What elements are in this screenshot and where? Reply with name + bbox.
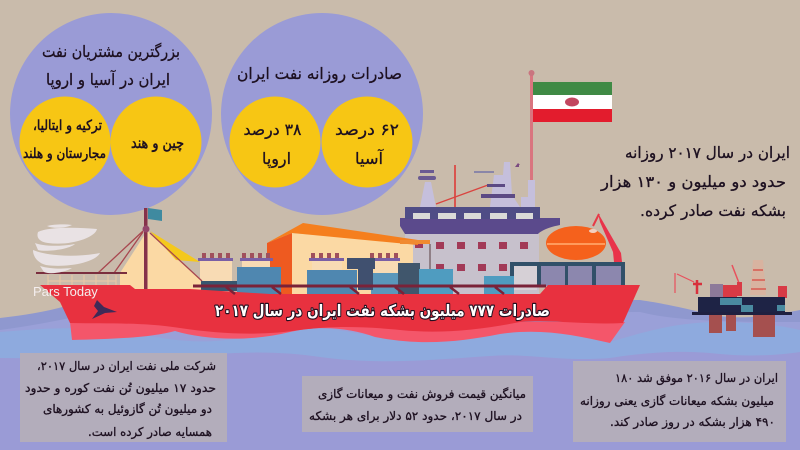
warehouse <box>267 223 431 294</box>
text block: 2017 daily export: ایران در سال ۲۰۱۷ روزانه <box>625 144 790 163</box>
text box: national oil company: دو میلیون تُن گازوئیل به کشورهای <box>43 402 212 417</box>
hull <box>40 285 640 343</box>
text box: national oil company: حدود ۱۷ میلیون تُن نفت کوره و حدود <box>25 381 216 396</box>
text box: average price <box>302 376 533 432</box>
bubble: 38 percent Europe: ۳۸ درصد <box>244 120 302 140</box>
heading: biggest customers <box>42 42 180 90</box>
text box: gas condensate <box>573 361 786 442</box>
text block: 2017 daily export: بشکه نفت صادر کرده. <box>640 202 786 220</box>
bubble: 62 percent Asia: آسیا <box>355 149 385 168</box>
lifeboat <box>546 213 622 262</box>
bubble: China and India: چین و هند <box>131 134 184 152</box>
text box: national oil company: شرکت ملی نفت ایران در سال ۲۰۱۷، <box>37 359 216 374</box>
heading: biggest customers: بزرگترین مشتریان نفت <box>42 42 180 62</box>
banner: annual exports: صادرات ۷۷۷ میلیون بشکه نفت ایران در سال ۲۰۱۷ <box>215 301 550 320</box>
heading: daily exports: صادرات روزانه نفت ایران <box>237 64 402 84</box>
text box: gas condensate: ۴۹۰ هزار بشکه در روز صادر کند. <box>610 415 775 430</box>
bubble: Turkey Italy Hungary Netherlands: ترکیه و ایتالیا، <box>33 118 102 134</box>
icon: Iranian flag <box>528 70 612 180</box>
ship bridge towers <box>418 162 535 208</box>
text box: gas condensate: میلیون بشکه میعانات گازی یعنی روزانه <box>580 394 774 409</box>
illustration: oil rig <box>675 260 792 337</box>
bubble: 38 percent Europe: اروپا <box>262 149 291 169</box>
heading: biggest customers: ایران در آسیا و اروپا <box>46 70 170 90</box>
superstructure <box>400 207 560 295</box>
bubble: 38 percent Europe <box>230 96 320 188</box>
text block: 2017 daily export <box>600 144 790 220</box>
foremast and sails <box>36 208 202 290</box>
circle panel: biggest customers <box>10 13 212 215</box>
circle panel: daily exports <box>221 13 423 215</box>
logo: Pars Today: Pars Today <box>33 284 98 299</box>
bubble: Turkey Italy Hungary Netherlands: مجارستان و هلند <box>23 146 106 162</box>
sea background <box>0 300 800 450</box>
bubble: 62 percent Asia <box>322 96 412 188</box>
text box: average price: میانگین قیمت فروش نفت و میعانات گازی <box>318 387 526 402</box>
icon: hull emblem <box>92 300 117 319</box>
bubble: China and India <box>110 96 202 188</box>
text box: average price: در سال ۲۰۱۷، حدود ۵۲ دلار برای هر بشکه <box>309 409 522 424</box>
bubble: 62 percent Asia: ۶۲ درصد <box>335 120 399 140</box>
containers <box>188 253 514 294</box>
cargo cage <box>510 262 625 290</box>
text block: 2017 daily export: حدود دو میلیون و ۱۳۰ هزار <box>600 173 786 192</box>
text box: national oil company: همسایه صادر کرده است. <box>88 425 212 440</box>
text box: gas condensate: ایران در سال ۲۰۱۶ موفق شد ۱۸۰ <box>615 371 778 386</box>
bubble: Turkey Italy Hungary Netherlands <box>20 96 110 188</box>
illustration: tanker ship <box>36 162 640 343</box>
logo: Pars Today <box>33 224 100 299</box>
text box: national oil company <box>20 353 227 442</box>
